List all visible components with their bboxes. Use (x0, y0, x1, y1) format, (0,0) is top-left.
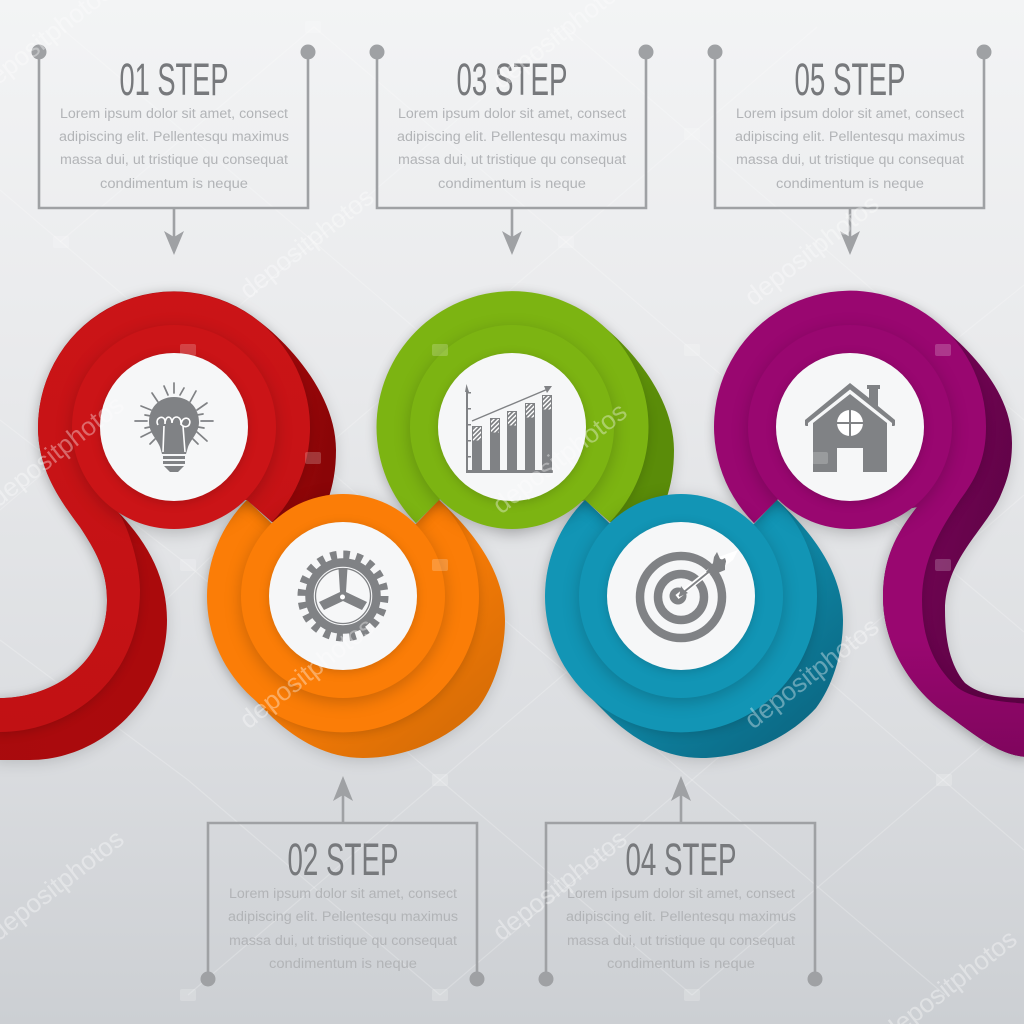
callout: 02 step: massa dui, ut tristique qu consequat (229, 933, 457, 948)
callout: 05 step: massa dui, ut tristique qu consequat (736, 152, 964, 167)
watermarks: depositphotos (233, 181, 379, 305)
icon: bar chart (465, 384, 553, 473)
callout: 03 step: adipiscing elit. Pellentesqu maximus (397, 129, 627, 144)
callout: 01 step: Lorem ipsum dolor sit amet, consect (60, 106, 288, 121)
step 2 orange outer ring (207, 500, 505, 758)
watermarks: depositphotos (486, 396, 632, 520)
callout: 03 step: condimentum is neque (438, 176, 586, 191)
callout: 01 step: 01 STEP (120, 54, 228, 105)
callout: 01 step: adipiscing elit. Pellentesqu maximus (59, 129, 289, 144)
callout: 01 step (32, 44, 316, 255)
watermarks: depositphotos (486, 823, 632, 947)
callout: 02 step: 02 STEP (288, 834, 398, 885)
step 4 teal disc (579, 494, 783, 698)
callout: 01 step: massa dui, ut tristique qu consequat (60, 152, 288, 167)
watermarks: depositphotos (738, 188, 884, 312)
callout: 03 step: massa dui, ut tristique qu consequat (398, 152, 626, 167)
icon: target with arrow (640, 550, 738, 638)
callout: 05 step (708, 44, 992, 255)
callout: 02 step: adipiscing elit. Pellentesqu maximus (228, 909, 458, 924)
callout: 04 step: 04 STEP (626, 834, 736, 885)
callout: 03 step: Lorem ipsum dolor sit amet, consect (398, 106, 626, 121)
callout: 03 step: 03 STEP (456, 54, 568, 105)
callout: 05 step: 05 STEP (794, 54, 906, 105)
callout: 02 step: Lorem ipsum dolor sit amet, consect (229, 886, 457, 901)
step 4 teal outer ring (545, 500, 843, 758)
step 5 purple ribbon and disc (714, 291, 1024, 757)
step 3 green ribbon and disc (377, 291, 674, 529)
step 1 red ribbon and disc (0, 291, 336, 760)
callout: 05 step: adipiscing elit. Pellentesqu maximus (735, 129, 965, 144)
callout: 04 step: adipiscing elit. Pellentesqu maximus (566, 909, 796, 924)
callout: 04 step: Lorem ipsum dolor sit amet, consect (567, 886, 795, 901)
callout: 02 step (200, 776, 484, 986)
callout: 02 step: condimentum is neque (269, 956, 417, 971)
callout: 03 step (370, 44, 654, 255)
step 2 orange disc (241, 494, 445, 698)
icon: light bulb (135, 383, 213, 472)
callout: 04 step: condimentum is neque (607, 956, 755, 971)
icon: gear (302, 555, 384, 637)
icon: house (805, 383, 895, 472)
watermarks: depositphotos (233, 611, 379, 735)
callout: 04 step: massa dui, ut tristique qu consequat (567, 933, 795, 948)
callout: 05 step: Lorem ipsum dolor sit amet, consect (736, 106, 964, 121)
callout: 01 step: condimentum is neque (100, 176, 248, 191)
callout: 05 step: condimentum is neque (776, 176, 924, 191)
callout: 04 step (538, 776, 822, 986)
watermarks: depositphotos (738, 611, 884, 735)
